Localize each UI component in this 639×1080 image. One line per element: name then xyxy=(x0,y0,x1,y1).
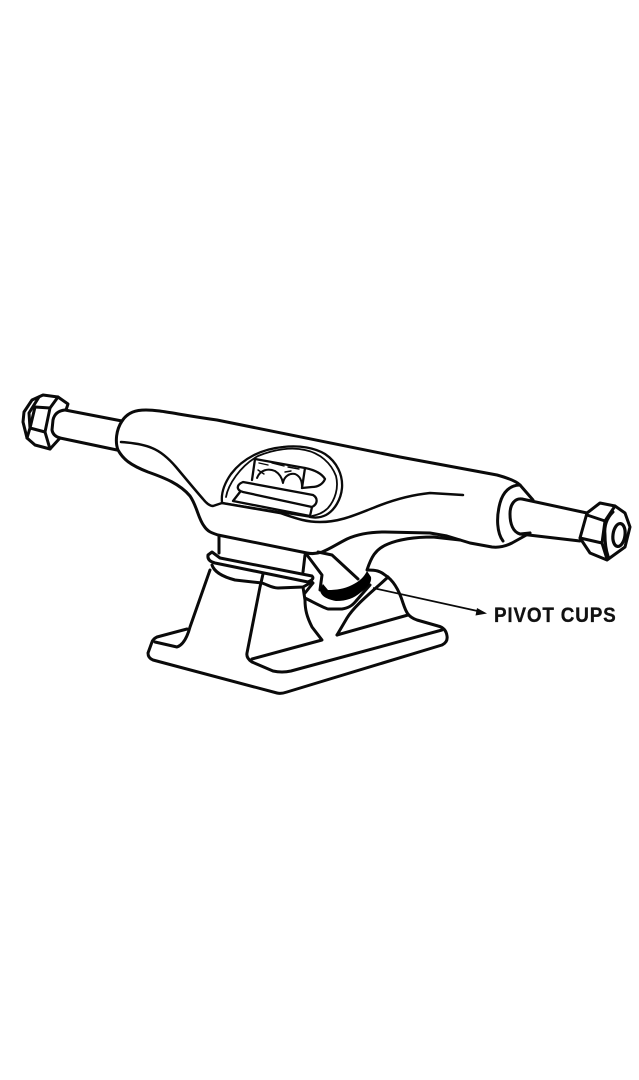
arrow pointing to the pivot cups label xyxy=(373,588,487,616)
left axle nut xyxy=(23,395,68,449)
kingpin window xyxy=(222,446,342,518)
right axle nut xyxy=(580,503,630,560)
pivot stem xyxy=(305,552,370,609)
left axle xyxy=(52,410,122,450)
right axle xyxy=(520,499,587,541)
baseplate xyxy=(148,570,447,693)
hanger end ring xyxy=(498,485,530,541)
kingpin collar and flange xyxy=(208,537,313,588)
icon: skateboard truck line drawing xyxy=(23,395,630,693)
hanger body outline xyxy=(116,410,533,570)
pivot cup highlight xyxy=(320,571,371,601)
label: pivot cups: PIVOT CUPS xyxy=(494,604,617,627)
top bushing and kingpin nut xyxy=(233,459,325,516)
